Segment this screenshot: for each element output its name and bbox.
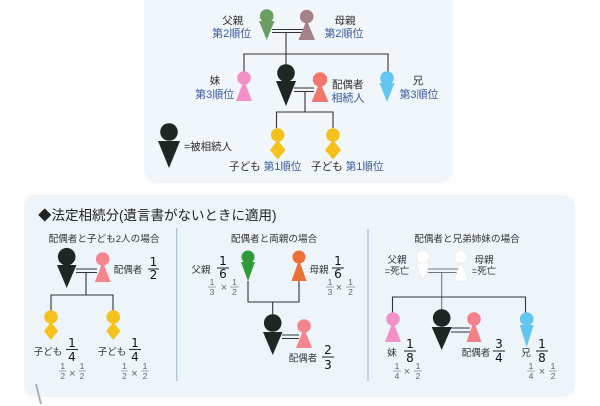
panel: family tree <box>144 0 453 183</box>
label: mother one sixth: 母親 <box>309 265 329 276</box>
label: mother one sixth <box>309 254 344 281</box>
formula: one third times one half: 1 <box>348 277 353 287</box>
label: mother rank <box>324 15 364 40</box>
label: father one sixth: 6 <box>219 267 227 281</box>
label: child one quarter: 子ども <box>34 347 62 358</box>
label: spouse three quarters: 4 <box>495 351 503 365</box>
formula: one third times one half: × <box>336 282 342 294</box>
subheading: 配偶者と両親の場合 <box>231 233 318 245</box>
formula: one quarter times one half <box>527 361 557 381</box>
label: younger sister rank: 第3順位 <box>195 87 234 101</box>
formula: one quarter times one half: 1 <box>395 361 400 371</box>
label: sister one eighth: 妹 <box>387 347 397 359</box>
label: spouse three quarters: 配偶者 <box>462 347 490 359</box>
label: mother rank: 母親 <box>334 15 356 27</box>
label: brother one eighth: 8 <box>538 351 546 365</box>
label: elder brother rank: 第3順位 <box>399 87 439 101</box>
formula: one quarter times one half: 4 <box>395 371 400 381</box>
formula: one third times one half: × <box>221 282 227 294</box>
formula: one half times one half <box>59 361 86 381</box>
label: child one quarter: 1 <box>68 336 76 350</box>
icon: child one <box>44 310 58 340</box>
label: spouse two thirds: 配偶者 <box>289 352 317 364</box>
formula: one quarter times one half: 1 <box>529 361 534 371</box>
label: father one sixth: 父親 <box>191 265 211 276</box>
label: child two rank: 子ども 第1順位 <box>311 160 384 173</box>
label: spouse heir: 相続人 <box>332 90 364 104</box>
icon: younger sister <box>385 312 401 342</box>
legend: decedent: =被相続人 <box>184 140 233 153</box>
formula: one third times one half <box>326 277 355 297</box>
formula: one quarter times one half <box>393 361 422 381</box>
icon: father <box>241 250 255 281</box>
label: spouse one half: 配偶者 <box>114 264 142 276</box>
section: spouse and siblings <box>385 233 557 381</box>
panel: statutory shares <box>24 195 575 397</box>
label: spouse heir: 配偶者 <box>332 78 363 91</box>
label: sister one eighth: 8 <box>406 351 414 365</box>
label: mother deceased: 母親 <box>474 255 494 266</box>
label: father rank: 父親 <box>222 15 244 27</box>
label: spouse three quarters <box>462 337 505 365</box>
label: child two quarter: 4 <box>131 350 139 364</box>
formula: one quarter times one half: × <box>539 366 545 378</box>
formula: one half times one half: 2 <box>122 371 127 381</box>
formula: one quarter times one half: 1 <box>551 361 556 371</box>
heading: ◆法定相続分(遺言書がないときに適用) <box>38 207 276 223</box>
label: elder brother rank: 兄 <box>413 75 424 87</box>
formula: one quarter times one half: 4 <box>529 371 534 381</box>
formula: one third times one half: 2 <box>348 287 353 297</box>
label: mother deceased: =死亡 <box>472 265 497 277</box>
icon: elder brother <box>380 71 394 102</box>
label: younger sister rank <box>195 75 234 101</box>
formula: one quarter times one half: 2 <box>551 371 556 381</box>
label: father rank: 第2順位 <box>212 26 251 40</box>
formula: one half times one half: 2 <box>80 371 85 381</box>
legend: decedent <box>158 123 233 168</box>
formula: one third times one half: 2 <box>232 287 237 297</box>
formula: one quarter times one half: 1 <box>416 361 421 371</box>
section: spouse and two children <box>34 233 160 381</box>
icon: father <box>259 9 274 40</box>
formula: one third times one half: 1 <box>210 277 215 287</box>
label: spouse three quarters: 3 <box>495 337 503 351</box>
label: spouse one half: 2 <box>150 268 157 282</box>
label: father one sixth <box>191 254 229 281</box>
icon: mother <box>292 250 306 281</box>
label: child one quarter: 4 <box>68 350 76 364</box>
formula: one third times one half: 1 <box>328 277 333 287</box>
label: child one quarter <box>34 336 78 364</box>
formula: one half times one half: 1 <box>60 361 65 371</box>
formula: one quarter times one half: × <box>404 366 410 378</box>
label: child two quarter: 1 <box>131 336 139 350</box>
label: father deceased: =死亡 <box>385 265 410 277</box>
label: spouse two thirds <box>289 343 334 372</box>
icon: spouse <box>312 72 328 102</box>
label: spouse two thirds: 2 <box>324 343 332 357</box>
label: child two quarter: 子ども <box>98 347 126 358</box>
icon: younger sister <box>236 71 252 101</box>
label: child one rank: 子ども 第1順位 <box>229 160 302 173</box>
icon: child two <box>106 310 120 340</box>
formula: one half times one half: × <box>131 368 138 380</box>
formula: one half times one half: 1 <box>122 361 127 371</box>
label: sister one eighth: 1 <box>406 337 414 351</box>
label: child two quarter <box>98 336 141 364</box>
label: mother one sixth: 1 <box>334 254 342 268</box>
formula: one half times one half: × <box>69 368 76 380</box>
label: brother one eighth <box>521 337 548 365</box>
formula: one half times one half: 1 <box>143 361 148 371</box>
icon: decedent <box>276 64 296 106</box>
icon: decedent <box>57 248 76 288</box>
icon: mother <box>298 10 315 40</box>
icon: spouse <box>296 319 312 348</box>
icon: child one <box>270 128 286 160</box>
label: father one sixth: 1 <box>219 254 227 268</box>
icon: deceased father <box>416 250 430 281</box>
icon: child two <box>325 128 341 160</box>
label: father deceased: 父親 <box>387 255 407 266</box>
label: mother rank: 第2順位 <box>324 26 364 40</box>
label: sister one eighth <box>387 337 416 365</box>
label: spouse one half: 1 <box>150 255 157 269</box>
formula: one half times one half: 2 <box>60 371 65 381</box>
subheading: 配偶者と子ども2人の場合 <box>49 233 160 245</box>
formula: one third times one half: 1 <box>232 277 237 287</box>
formula: one quarter times one half: 2 <box>416 371 421 381</box>
icon: spouse <box>95 252 111 282</box>
formula: one third times one half: 3 <box>328 287 333 297</box>
icon: decedent <box>263 314 282 355</box>
label: father deceased <box>385 255 410 277</box>
label: spouse two thirds: 3 <box>324 358 332 372</box>
label: spouse heir <box>332 78 364 104</box>
formula: one half times one half: 2 <box>143 371 148 381</box>
label: mother deceased <box>472 255 497 277</box>
label: spouse one half <box>114 255 159 282</box>
formula: one third times one half <box>208 277 239 297</box>
icon: elder brother <box>520 312 534 347</box>
formula: one half times one half <box>121 361 149 381</box>
formula: one half times one half: 1 <box>80 361 85 371</box>
formula: one third times one half: 3 <box>210 287 215 297</box>
subheading: 配偶者と兄弟姉妹の場合 <box>414 233 520 245</box>
icon: spouse <box>466 312 482 342</box>
label: mother one sixth: 6 <box>334 267 342 281</box>
icon: decedent <box>432 309 452 350</box>
label: younger sister rank: 妹 <box>210 75 221 87</box>
icon: deceased mother <box>454 250 468 281</box>
label: brother one eighth: 兄 <box>521 348 531 359</box>
label: father rank <box>212 15 251 40</box>
label: brother one eighth: 1 <box>538 337 546 351</box>
section: spouse and parents <box>191 233 355 372</box>
label: elder brother rank <box>399 75 439 101</box>
